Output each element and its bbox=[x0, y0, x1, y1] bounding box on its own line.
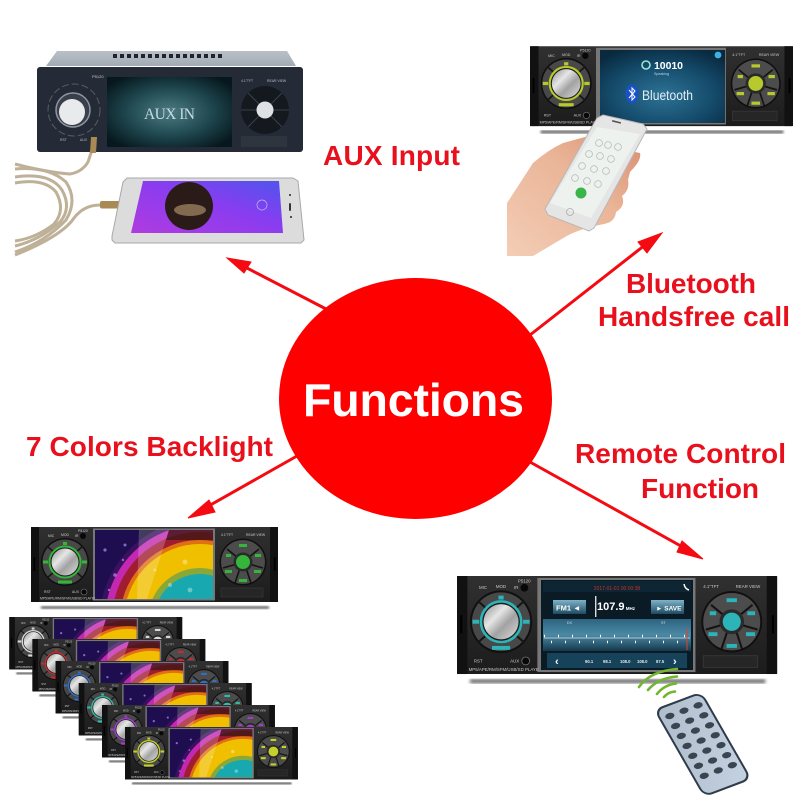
preset station bar: › bbox=[673, 656, 677, 668]
preset station bar: 87.5 bbox=[656, 659, 665, 664]
AUX radio button pad: REAR VIEW bbox=[267, 79, 287, 83]
label: Remote Control Function bbox=[575, 438, 786, 504]
hand bbox=[507, 137, 640, 256]
green call button bbox=[576, 188, 586, 198]
arrow: to backlight bbox=[188, 456, 297, 518]
AUX radio volume knob bbox=[48, 74, 104, 142]
tuning band bbox=[543, 619, 691, 651]
AUX radio top housing bbox=[46, 51, 296, 66]
SAVE button bbox=[651, 600, 684, 614]
label: Remote Control Function: Remote Control bbox=[575, 438, 786, 469]
SAVE button: ► SAVE bbox=[656, 606, 682, 612]
panel: AUX input product photo bbox=[15, 51, 304, 255]
panel: 7 colors backlight main radio bbox=[31, 527, 278, 609]
AUX radio button pad: 4.1"TFT bbox=[241, 79, 253, 83]
AUX radio volume knob: P5120 bbox=[92, 74, 104, 79]
album art bbox=[165, 182, 213, 230]
preset station bar: 98.1 bbox=[603, 659, 612, 664]
Bluetooth radio screen bbox=[600, 50, 725, 123]
panel: Bluetooth handsfree product photo bbox=[507, 46, 793, 256]
label: 7 Colors Backlight: 7 Colors Backlight bbox=[26, 431, 273, 462]
handset with dial pad bbox=[545, 115, 647, 231]
AUX radio screen bbox=[107, 77, 232, 147]
yellow backlight radio bbox=[125, 727, 298, 784]
icon: remote control bbox=[655, 693, 750, 796]
tuning band: DX bbox=[567, 621, 573, 625]
preset station bar bbox=[547, 653, 687, 668]
blue backlight radio bbox=[56, 661, 228, 718]
preset station bar: 108.0 bbox=[620, 659, 631, 664]
arrow: to AUX input bbox=[227, 258, 328, 310]
arrow: to remote control bbox=[530, 462, 703, 559]
bluetooth logo bbox=[626, 84, 638, 104]
date and time: 2017-01-01 00:00:38 bbox=[594, 586, 640, 592]
FM radio screen bbox=[539, 578, 695, 672]
label: Remote Control Function: Function bbox=[641, 473, 759, 504]
call number: 10010 bbox=[654, 60, 683, 72]
phone jack bbox=[100, 201, 121, 208]
smartphone bbox=[112, 178, 304, 243]
call icon bbox=[642, 61, 650, 69]
teal backlight radio bbox=[79, 683, 252, 740]
central red circle with title bbox=[279, 278, 552, 519]
AUX radio volume knob: RST bbox=[60, 138, 67, 142]
purple backlight radio bbox=[102, 705, 275, 762]
AUX jack on radio bbox=[90, 137, 97, 153]
AUX radio faceplate bbox=[37, 67, 303, 152]
panel: remote control product photo bbox=[457, 576, 777, 796]
preset station bar: 90.1 bbox=[585, 659, 594, 664]
FM1 button: FM1 ◄ bbox=[556, 604, 581, 612]
speaking label: Speaking bbox=[654, 72, 669, 76]
label: Bluetooth Handsfree call: Handsfree call bbox=[598, 301, 790, 332]
AUX IN screen label: AUX IN bbox=[144, 106, 195, 123]
icon: wireless signal arcs bbox=[639, 669, 677, 697]
FM1 button bbox=[553, 600, 586, 614]
arrow: to Bluetooth bbox=[530, 233, 662, 335]
AUX radio button pad bbox=[241, 79, 289, 147]
Bluetooth radio bbox=[530, 46, 793, 134]
phone status icon bbox=[684, 584, 689, 590]
white backlight radio bbox=[9, 617, 182, 674]
label: Bluetooth Handsfree call: Bluetooth bbox=[626, 268, 756, 299]
tuning band: ST bbox=[661, 621, 666, 625]
bluetooth wordmark: Bluetooth bbox=[642, 87, 693, 103]
AUX radio volume knob: AUX bbox=[80, 138, 88, 142]
panel: stack of colored radios bbox=[9, 617, 298, 784]
title: Functions bbox=[303, 374, 524, 426]
preset station bar: 108.0 bbox=[637, 659, 648, 664]
remote function radio bbox=[457, 576, 777, 683]
preset station bar: ‹ bbox=[555, 656, 559, 668]
label: Bluetooth Handsfree call bbox=[598, 268, 790, 332]
frequency readout: 107.9 MHz bbox=[597, 601, 636, 613]
label: AUX Input: AUX Input bbox=[323, 140, 460, 171]
red backlight radio bbox=[32, 639, 205, 696]
AUX cable bbox=[15, 147, 100, 255]
